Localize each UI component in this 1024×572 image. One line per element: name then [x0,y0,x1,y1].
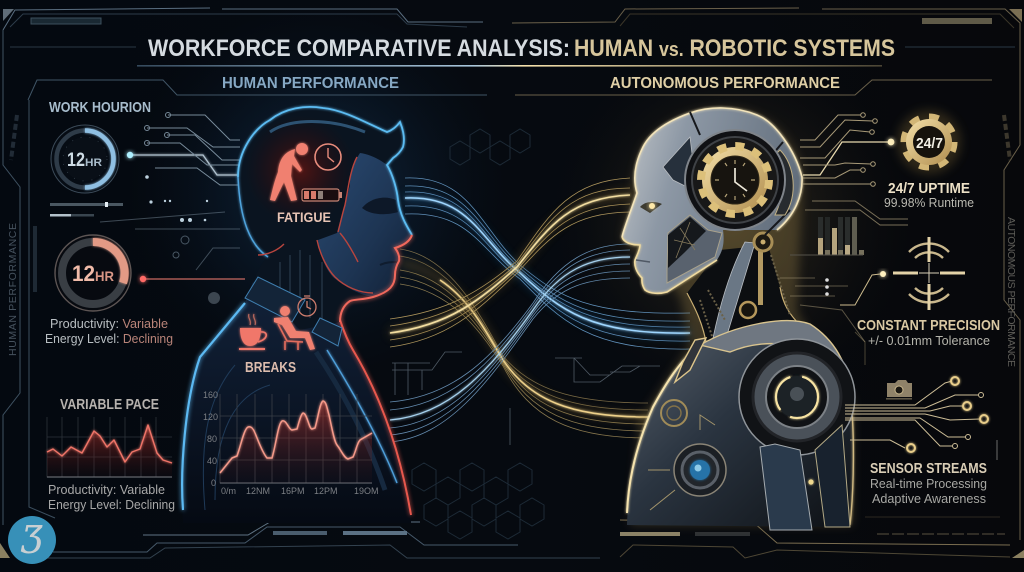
gauge: 12hr red: HR [95,268,114,284]
icon: fatigued person [270,143,308,201]
sensor stream circuit [845,377,997,460]
status text upper: Energy Level: Declining [45,331,173,346]
vertical label: autonomous: AUTONOMOUS PERFORMANCE [1005,217,1017,367]
status text upper: Productivity: Variable [50,316,168,331]
status text lower: Productivity: Variable [48,482,165,497]
chart: breaks: 16PM [281,486,305,496]
icon: coffee cup [239,314,266,350]
human head [238,107,412,330]
connector dot: uptime [888,139,894,145]
status text upper [45,316,173,346]
label: uptime [884,180,974,210]
human collar [245,277,342,346]
gauge: work hours small: 12 [67,150,85,171]
logo badge [8,516,56,564]
center circuit details [392,352,660,445]
robot figure [622,108,855,530]
stream: blue human to robot [405,178,690,349]
robot head [622,108,802,293]
status text lower: Energy Level: Declining [48,497,175,512]
heading: work hours: WORK HOURION [49,99,151,116]
chart: variable pace [47,417,172,477]
small progress bars [33,202,123,292]
heading: variable pace: VARIABLE PACE [60,396,159,413]
label: precision: CONSTANT PRECISION [857,317,1000,334]
icon: camera [886,380,912,400]
icon: clock [315,144,341,170]
gauge: work hours small: HR [85,157,102,169]
title: WORKFORCE COMPARATIVE ANALYSIS: [148,35,570,62]
human figure [182,107,412,523]
right circuit traces [780,113,908,342]
label: breaks: BREAKS [245,359,296,376]
vertical label: human: HUMAN PERFORMANCE [7,223,19,356]
title: HUMAN vs. ROBOTIC SYSTEMS [574,35,895,62]
label: precision: +/- 0.01mm Tolerance [868,333,990,348]
chart: breaks: 160 [203,390,218,400]
label: sensor streams: SENSOR STREAMS [870,460,987,477]
label: sensor streams: Adaptive Awareness [872,491,986,506]
chart: breaks [203,390,379,496]
left circuit traces [100,112,240,270]
stream: blue robot to human [390,244,630,442]
gauge: 12hr red [55,235,131,311]
icon: head gear clock [685,130,785,230]
chart: breaks: 0 [211,478,216,488]
label: precision [857,317,1000,348]
icon: precision target [893,237,965,310]
icon: 24/7 gear [897,110,961,174]
chart: breaks: 80 [207,434,217,444]
stream: gold faint human to robot [400,249,648,438]
heading: human performance: HUMAN PERFORMANCE [222,75,399,92]
stream: gold robot to human [390,178,630,347]
label: uptime: 99.98% Runtime [884,195,974,210]
data streams between figures [390,178,690,442]
label: fatigue: FATIGUE [277,209,331,225]
chart: breaks: 120 [203,412,218,422]
icon: low battery [302,189,342,201]
icon: 24/7 gear: 24/7 [916,135,943,152]
label: uptime: 24/7 UPTIME [888,180,970,197]
chart: breaks: 12PM [314,486,338,496]
chart: breaks: 19OM [354,486,379,496]
label: sensor streams [870,460,987,506]
status text lower [48,482,175,512]
robot neck [687,233,800,347]
title [148,35,895,62]
logo badge: Ʒ [20,518,43,562]
connector: red gauge [140,276,245,282]
heading: autonomous performance: AUTONOMOUS PERFORMANCE [610,75,840,92]
chart: breaks: 0/m [221,486,236,496]
label: sensor streams: Real-time Processing [870,476,987,491]
gauge: work hours small [51,125,119,193]
title rule [137,65,882,67]
left node dots [127,152,220,304]
connector dot: precision [880,271,886,277]
chart: breaks: 40 [207,456,217,466]
mini bar chart [790,217,864,296]
icon: resting person [274,306,315,350]
human body [182,282,411,523]
robot halo [622,108,853,525]
icon: small clock [298,296,316,316]
gauge: 12hr red: 12 [72,261,95,286]
hexagon pattern [412,129,544,539]
chart: breaks: 12NM [246,486,270,496]
robot body [627,320,855,530]
